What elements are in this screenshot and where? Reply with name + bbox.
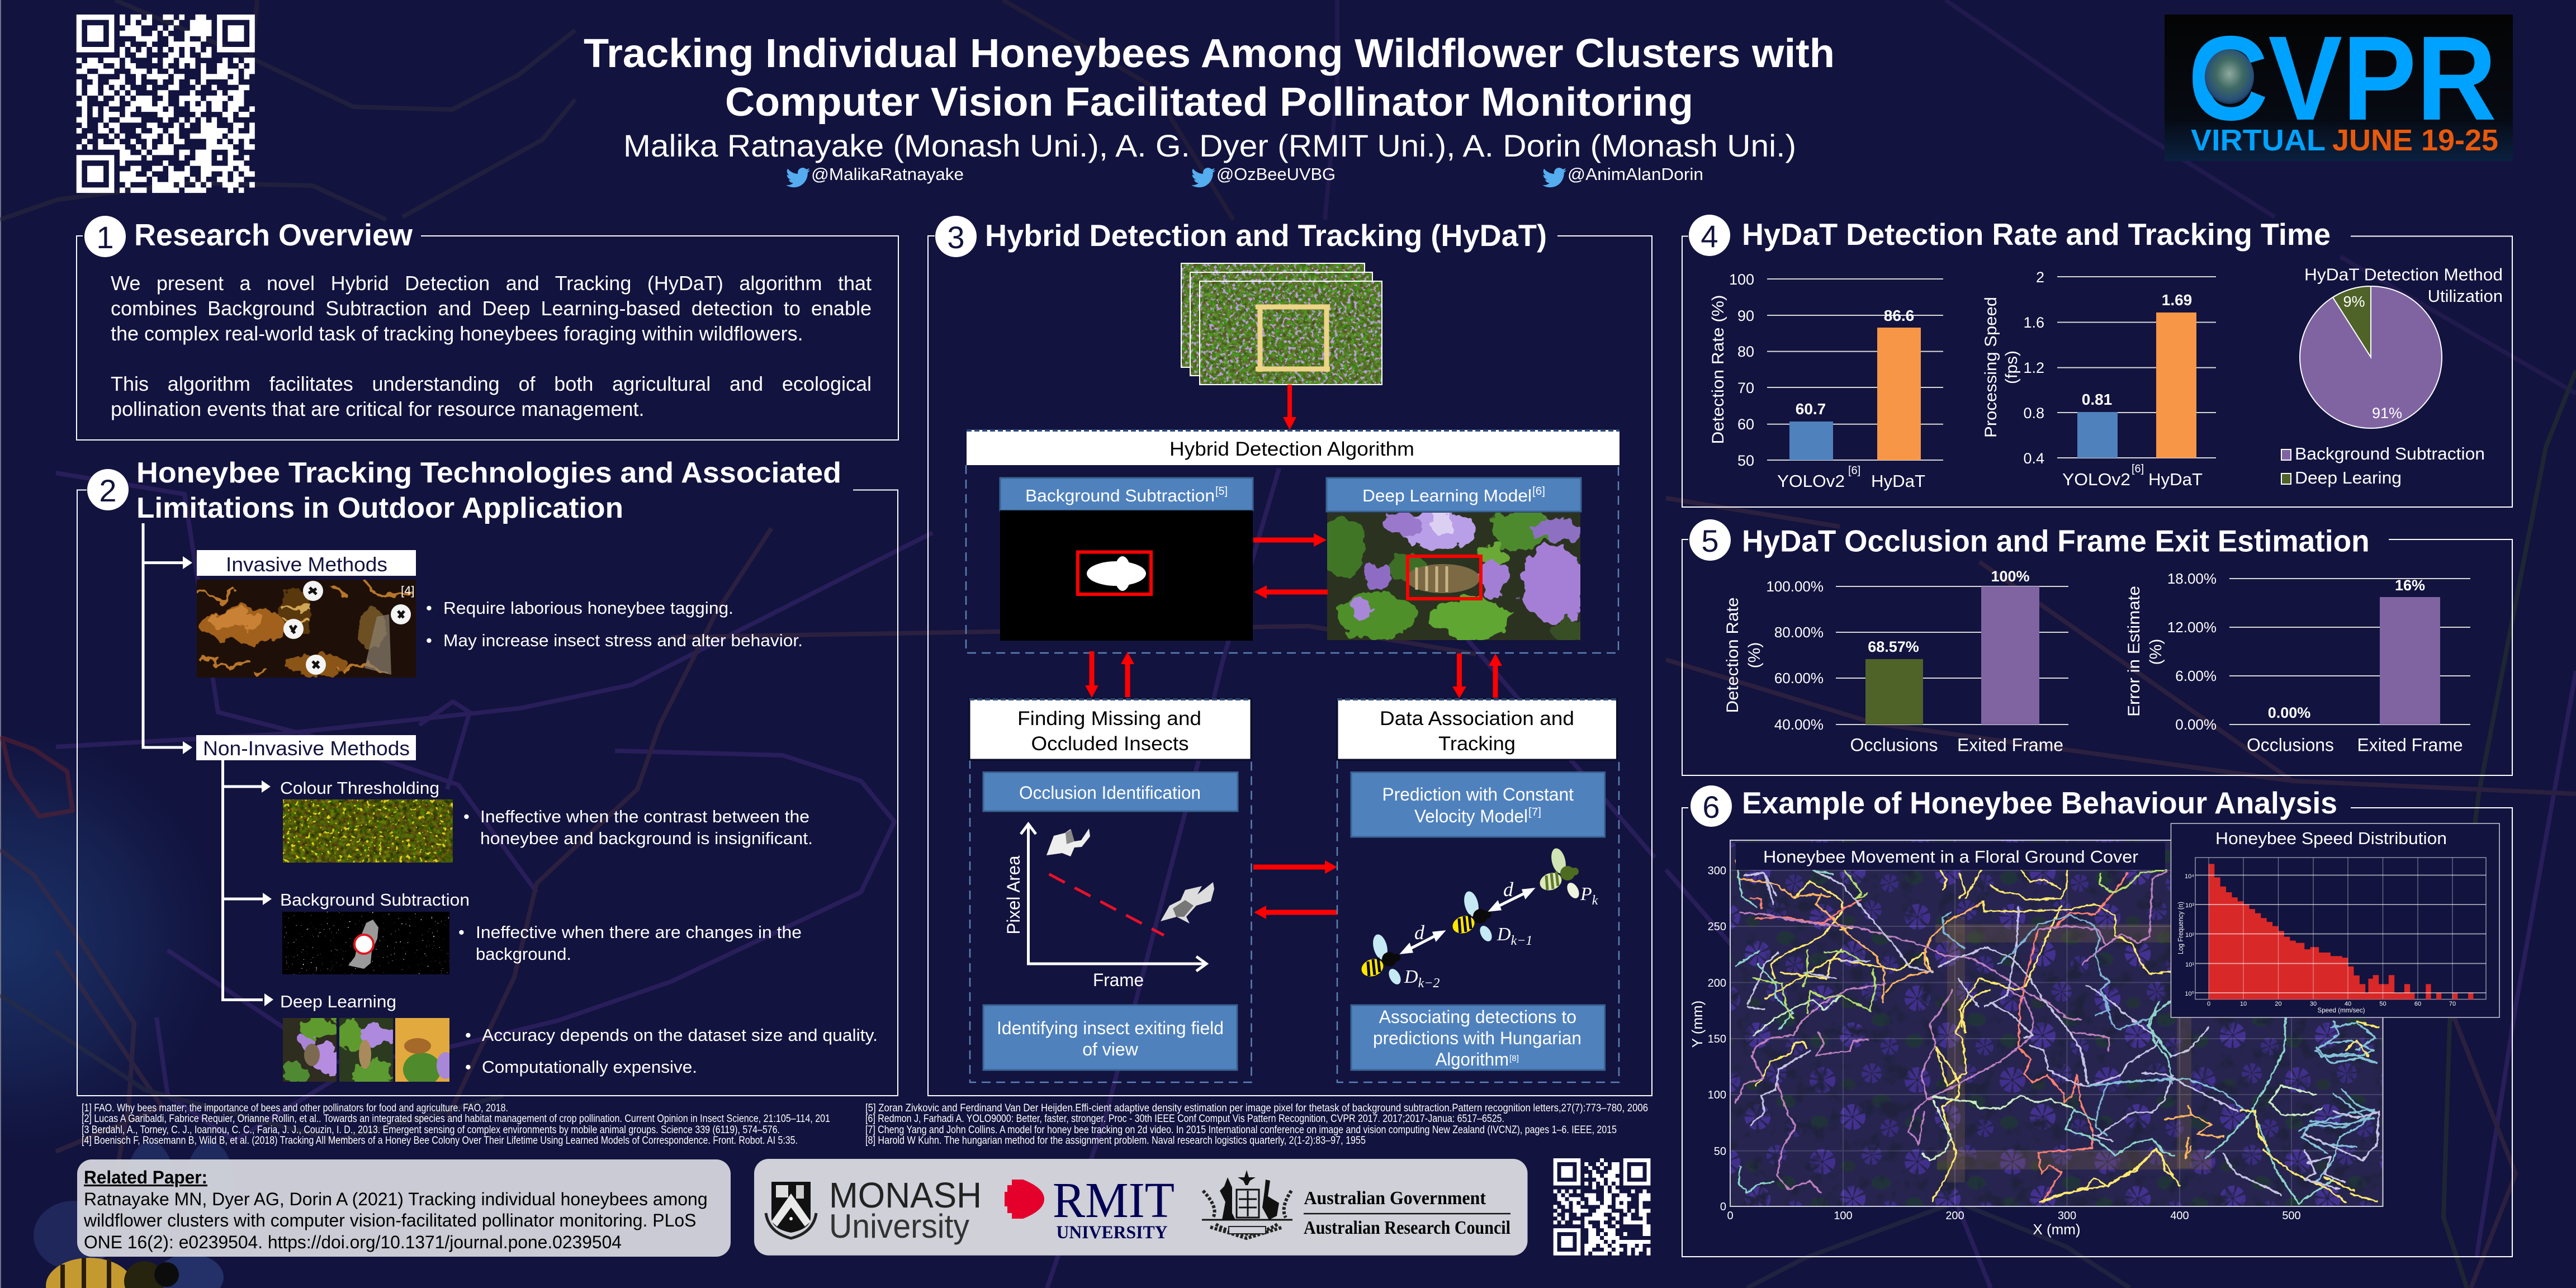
twitter handles	[786, 164, 1703, 187]
RMIT University logo: UNIVERSITY	[1057, 1223, 1168, 1243]
bar chart: detection rate: YOLOv2	[1777, 471, 1845, 491]
bar chart: detection rate: 100.00%	[1766, 578, 1824, 595]
plot axes labels: X (mm)	[2033, 1221, 2081, 1238]
invasive bullets	[426, 598, 803, 650]
Australian Research Council wordmark: Australian Government	[1304, 1188, 1486, 1209]
pixel area chart: Frame	[1093, 970, 1144, 990]
invasive bullets: •	[426, 598, 432, 618]
bar chart: detection rate: 60	[1737, 416, 1754, 433]
bar chart: processing speed	[1982, 269, 2216, 489]
twitter handles: @MalikaRatnayake	[811, 164, 964, 184]
bee tracking diagram	[1359, 847, 1598, 991]
number badge 6: 6	[1702, 789, 1720, 825]
bar chart: detection rate: Exited Frame	[1957, 735, 2063, 755]
bar chart: detection rate	[1723, 568, 2068, 755]
header	[1337, 699, 1617, 760]
occlusion identification box	[983, 773, 1238, 811]
overview paragraph: This algorithm facilitates understanding of both agricultural and ecological	[111, 372, 872, 395]
bar chart: detection rate: 60.7	[1796, 400, 1826, 418]
overview paragraph: the complex real-world task of tracking honeybees foraging within wildflowers.	[111, 322, 803, 345]
bar chart: processing speed: Processing Speed	[1982, 297, 2000, 438]
pie chart: detection method utilization: Deep Learing	[2295, 468, 2402, 487]
bar chart: detection rate: (%)	[1745, 642, 1764, 668]
associating detections box: Algorithm	[1436, 1049, 1509, 1069]
inset histogram: speed distribution: 10¹	[2185, 962, 2194, 968]
icon: twitter bird	[1191, 168, 1215, 187]
background subtraction: •	[458, 922, 465, 942]
Monash University logo: MONASH	[829, 1175, 982, 1215]
bar chart: processing speed: [6]	[2132, 463, 2144, 475]
bar chart: processing speed: 1.6	[2023, 314, 2044, 331]
photo: tagged honeybees: [4]	[401, 584, 414, 598]
hybrid detection header: Hybrid Detection Algorithm	[1169, 438, 1414, 460]
deep learning	[280, 992, 878, 1088]
arrow: background subtraction to deep learning	[1253, 533, 1327, 547]
inset histogram: speed distribution: 10²	[2185, 932, 2194, 939]
bar chart: detection rate: Detection Rate (%)	[1709, 295, 1727, 444]
bar chart: error in estimate: 16%	[2395, 577, 2425, 594]
inset histogram: speed distribution: Speed (mm/sec)	[2318, 1006, 2365, 1014]
panel 5: occlusion and frame exit	[1682, 519, 2512, 775]
pie chart: detection method utilization: 9%	[2343, 293, 2365, 310]
number badge 3: 3	[947, 220, 965, 255]
pie chart: detection method utilization: 91%	[2372, 405, 2402, 422]
inset histogram: speed distribution: 50	[2379, 1001, 2386, 1007]
number badge 4: 4	[1701, 219, 1718, 254]
inset histogram: speed distribution: 40	[2345, 1001, 2351, 1007]
bee tracking diagram: D	[1497, 924, 1511, 945]
number badge 2	[87, 469, 129, 510]
arrow: deep learning to background subtraction	[1254, 585, 1328, 599]
tree connector arrows	[143, 523, 273, 1006]
title	[584, 31, 1835, 125]
inset histogram: speed distribution: Honeybee Speed Distribution	[2215, 828, 2447, 848]
bar chart: detection rate: 40.00%	[1774, 716, 1824, 733]
invasive methods label: Invasive Methods	[226, 553, 387, 576]
plot axes labels: 0	[1720, 1201, 1726, 1213]
inset histogram: speed distribution: 10³	[2185, 902, 2194, 909]
deep learning module	[1319, 478, 1592, 643]
plot title band	[1736, 842, 2165, 870]
inset histogram: speed distribution: 10⁴	[2185, 873, 2194, 880]
prediction box: Prediction with Constant	[1382, 784, 1574, 804]
number badge 5	[1689, 519, 1731, 561]
associating detections box: predictions with Hungarian	[1373, 1028, 1581, 1048]
colour thresholding: honeybee and background is insignificant.	[480, 828, 813, 848]
references left: [1] FAO. Why bees matter; the importance of bees and other pollinators for food and agriculture. FAO, 2018.	[82, 1102, 508, 1114]
number badge 6	[1690, 785, 1732, 827]
deep learning module: Deep Learning Model	[1362, 486, 1532, 505]
inset histogram: speed distribution: 10⁰	[2185, 991, 2195, 997]
icon: twitter bird	[786, 168, 810, 187]
photo: yellow flowers	[283, 799, 453, 863]
CVPR logo: CVPR	[2188, 11, 2497, 145]
plot axes labels: 300	[2058, 1210, 2076, 1222]
bar chart: processing speed: 0.81	[2082, 391, 2112, 408]
number badge 1: 1	[96, 220, 114, 255]
RMIT University logo	[1005, 1173, 1175, 1243]
colour thresholding	[280, 778, 813, 863]
deep learning: Deep Learning	[280, 992, 396, 1011]
twitter handles: @AnimAlanDorin	[1568, 164, 1703, 184]
Australian Research Council wordmark: Australian Research Council	[1304, 1218, 1510, 1238]
bee tracking diagram: k−1	[1511, 934, 1532, 948]
QR code bottom right	[1554, 1158, 1650, 1256]
inset histogram: speed distribution	[2171, 823, 2499, 1017]
plot axes labels: 150	[1708, 1033, 1726, 1045]
inset histogram: speed distribution: 0	[2207, 1001, 2210, 1007]
bar chart: processing speed: YOLOv2	[2062, 470, 2130, 489]
CVPR logo: JUNE 19-25	[2332, 124, 2498, 157]
plot axes labels: 200	[1708, 977, 1726, 989]
pixel area chart: Pixel Area	[1003, 855, 1024, 935]
background subtraction: background.	[476, 944, 571, 964]
references right	[865, 1102, 1648, 1147]
bar chart: processing speed: 1.2	[2023, 359, 2044, 376]
header	[969, 699, 1251, 760]
photos: bee crops	[282, 1015, 454, 1088]
panel 4: detection rate and tracking time	[1682, 215, 2512, 507]
heading: HyDaT Occlusion and Frame Exit Estimation	[1742, 523, 2370, 558]
background subtraction module	[1000, 478, 1253, 641]
bee trajectories	[1736, 861, 2379, 1204]
number badge 4	[1689, 215, 1730, 256]
deep learning module: [6]	[1532, 485, 1545, 498]
invasive bullets: •	[426, 631, 432, 650]
references right: [5] Zoran Zivkovic and Ferdinand Van Der Heijden.Effi-cient adaptive density estimation per image pixel for thetask of background subtraction.Pattern recognition letters,27(7):773–780, 2006	[865, 1102, 1648, 1114]
bar chart: detection rate: 50	[1737, 452, 1754, 469]
plot axes labels: 400	[2170, 1210, 2189, 1222]
identifying insect exiting box: Identifying insect exiting field	[997, 1018, 1224, 1038]
bar chart: detection rate: HyDaT	[1871, 471, 1925, 491]
bar chart: error in estimate: (%)	[2147, 639, 2165, 665]
bee tracking diagram: k−2	[1418, 976, 1439, 991]
photo: bee on flowers	[1327, 513, 1580, 640]
bee tracking diagram: k	[1592, 893, 1598, 908]
bar chart: error in estimate: Exited Frame	[2357, 735, 2463, 755]
related paper card: ONE 16(2): e0239504. https://doi.org/10.1371/journal.pone.0239504	[84, 1232, 622, 1252]
background subtraction: Background Subtraction	[280, 890, 470, 910]
deep learning: Accuracy depends on the dataset size and quality.	[482, 1025, 878, 1045]
bee tracking diagram: d	[1503, 878, 1514, 901]
invasive methods label	[197, 550, 416, 576]
Australian Research Council wordmark	[1304, 1188, 1510, 1238]
inset histogram: speed distribution: 30	[2310, 1001, 2317, 1007]
bar chart: error in estimate: 12.00%	[2167, 619, 2217, 636]
overview paragraph: combines Background Subtraction and Deep Learning-based detection to enable	[111, 297, 872, 320]
arrows: occlusion and tracking exchange	[1253, 860, 1338, 919]
bar chart: error in estimate: 0.00%	[2175, 716, 2217, 733]
associating detections box	[1351, 1005, 1605, 1070]
plot axes labels	[1689, 865, 2301, 1238]
header: Occluded Insects	[1031, 733, 1188, 755]
CVPR logo: VIRTUAL	[2191, 124, 2326, 157]
number badge 5: 5	[1701, 523, 1719, 558]
data association and tracking	[1337, 699, 1619, 1082]
movement plot	[1689, 840, 2383, 1238]
bar chart: detection rate: 100%	[1991, 568, 2030, 585]
number badge 2: 2	[99, 473, 117, 508]
occlusion identification box: Occlusion Identification	[1019, 783, 1201, 803]
references right: [8] Harold W Kuhn. The hungarian method for the assignment problem. Naval research logistics quarterly, 2(1-2):83–97, 1955	[865, 1135, 1366, 1147]
title: Computer Vision Facilitated Pollinator Monitoring	[725, 80, 1693, 125]
bar chart: processing speed: HyDaT	[2148, 470, 2203, 489]
header: Finding Missing and	[1017, 708, 1201, 730]
plot axes labels: 200	[1945, 1210, 1964, 1222]
prediction box: [7]	[1528, 806, 1541, 818]
deep learning: •	[465, 1025, 471, 1045]
identifying insect exiting box: of view	[1082, 1039, 1139, 1059]
bar chart: detection rate: 100	[1729, 271, 1754, 288]
RMIT University logo: RMIT	[1053, 1173, 1175, 1228]
inset histogram: speed distribution: 70	[2449, 1001, 2456, 1007]
heading: Honeybee Tracking Technologies and Associated	[136, 457, 841, 489]
panel 2: tracking technologies	[77, 457, 898, 1096]
pie chart: detection method utilization: Utilization	[2428, 286, 2503, 306]
authors: Malika Ratnayake (Monash Uni.), A. G. Dyer (RMIT Uni.), A. Dorin (Monash Uni.)	[623, 128, 1796, 163]
inset histogram: speed distribution: 20	[2275, 1001, 2282, 1007]
related paper card: Related Paper:	[84, 1167, 207, 1187]
bar chart: error in estimate: Error in Estimate	[2125, 586, 2143, 717]
pie chart: detection method utilization: HyDaT Detection Method	[2304, 265, 2503, 284]
bar chart: error in estimate: 6.00%	[2175, 667, 2217, 684]
overview paragraph: We present a novel Hybrid Detection and Tracking (HyDaT) algorithm that	[111, 272, 872, 295]
heading: HyDaT Detection Rate and Tracking Time	[1742, 217, 2331, 252]
invasive bullets: May increase insect stress and alter behavior.	[443, 631, 803, 650]
related paper card: Ratnayake MN, Dyer AG, Dorin A (2021) Tracking individual honeybees among	[84, 1189, 708, 1209]
plot title band: Honeybee Movement in a Floral Ground Cover	[1763, 847, 2138, 866]
heading: Example of Honeybee Behaviour Analysis	[1742, 785, 2337, 820]
photo stack: video frames	[1181, 263, 1382, 385]
heading	[136, 457, 841, 524]
overview paragraph	[111, 271, 872, 438]
plot axes labels: 0	[1727, 1210, 1734, 1222]
Monash University logo: University	[829, 1208, 969, 1245]
heading: Research Overview	[134, 217, 413, 252]
finding missing and occluded insects	[969, 699, 1251, 1082]
bar chart: processing speed: 2	[2036, 269, 2044, 286]
bar chart: detection rate: [6]	[1848, 465, 1860, 477]
Australian coat of arms	[1202, 1170, 1292, 1238]
deep learning: •	[465, 1057, 471, 1077]
photo: binary mask	[282, 912, 449, 974]
plot axes labels: 300	[1708, 865, 1726, 877]
references right: [7] Cheng Yang and John Collins. A model for honey bee tracking on 2d video. In 2015 International conference on image and vision computing New Zealand (IVCNZ), pages 1–6. IEEE, 2015	[865, 1124, 1617, 1136]
background subtraction: Ineffective when there are changes in the	[476, 922, 802, 942]
hybrid detection group	[966, 430, 1620, 653]
number badge 3	[935, 216, 977, 257]
heading: Limitations in Outdoor Application	[136, 492, 623, 524]
logo strip	[754, 1159, 1527, 1256]
references right: [6] Redmon J, Farhadi A. YOLO9000: Better, faster, stronger. Proc - 30th IEEE Conf Comput Vis Pattern Recognition, CVPR 2017. 2017;2017-Janua: 6517–6525.	[865, 1113, 1504, 1125]
plot axes labels: 100	[1834, 1210, 1853, 1222]
number badge 1	[84, 216, 126, 257]
heading: Hybrid Detection and Tracking (HyDaT)	[985, 218, 1547, 253]
photo: tagged honeybees	[197, 580, 416, 678]
colour thresholding: Ineffective when the contrast between the	[480, 807, 809, 826]
invasive bullets: Require laborious honeybee tagging.	[443, 598, 733, 618]
inset histogram: speed distribution: 60	[2414, 1001, 2421, 1007]
bar chart: detection rate: 60.00%	[1774, 670, 1824, 686]
bar chart: error in estimate: 18.00%	[2167, 570, 2217, 587]
inset histogram: speed distribution: 10	[2240, 1001, 2247, 1007]
icon: twitter bird	[1542, 168, 1566, 187]
bar chart: processing speed: 0.8	[2023, 405, 2044, 422]
plot axes labels: 50	[1714, 1145, 1726, 1158]
colour thresholding: •	[463, 807, 470, 826]
ruler frame in photo	[1935, 917, 2212, 1182]
bar chart: processing speed: (fps)	[2002, 351, 2021, 384]
non-invasive methods label: Non-Invasive Methods	[203, 737, 410, 760]
background subtraction	[280, 890, 802, 974]
references left	[82, 1102, 830, 1147]
arrows: detection and tracking exchange	[1452, 654, 1502, 698]
bar chart: error in estimate: Occlusions	[2247, 735, 2334, 755]
bar chart: detection rate: 80.00%	[1774, 624, 1824, 641]
related paper card	[77, 1159, 731, 1257]
arrow: frames to algorithm	[1283, 385, 1296, 430]
deep learning: Computationally expensive.	[482, 1057, 697, 1077]
panel 3: hybrid detection and tracking	[928, 216, 1652, 1096]
header: Tracking	[1438, 733, 1516, 755]
references left: [3 Berdahl, A., Torney, C. J., Ioannou, C. C., Faria, J. J., Couzin, I. D., 2013. Emergent sensing of complex environments by mobile animal groups. Science 339 (6119), 574–576.	[82, 1124, 780, 1136]
icon: bee in lower left corner	[46, 1258, 179, 1288]
arrows: detection and occlusion exchange	[1085, 651, 1134, 698]
bar chart: detection rate: 70	[1737, 380, 1754, 396]
panel 6: behaviour analysis	[1682, 785, 2512, 1257]
pie chart: detection method utilization	[2281, 265, 2503, 487]
QR code top left	[77, 15, 255, 193]
plot axes labels: 500	[2282, 1210, 2301, 1222]
panel 1: research overview	[77, 216, 898, 440]
background subtraction module: Background Subtraction	[1025, 486, 1215, 505]
background subtraction module: [5]	[1215, 485, 1228, 498]
Monash University logo	[766, 1175, 982, 1245]
bar chart: error in estimate	[2125, 570, 2470, 755]
pie chart: detection method utilization: Background Subtraction	[2295, 444, 2485, 463]
bar chart: error in estimate: 0.00%	[2268, 704, 2310, 721]
identifying insect exiting box	[983, 1005, 1237, 1070]
pixel area chart	[1003, 824, 1214, 990]
bar chart: detection rate: Detection Rate	[1723, 597, 1742, 713]
associating detections box: Associating detections to	[1379, 1007, 1576, 1027]
plot axes labels: Y (mm)	[1689, 1001, 1706, 1048]
prediction box	[1351, 773, 1605, 837]
bar chart: processing speed: 1.69	[2162, 291, 2192, 309]
bar chart: processing speed: 0.4	[2023, 450, 2044, 467]
twitter handles: @OzBeeUVBG	[1216, 164, 1336, 184]
bee tracking diagram: P	[1580, 884, 1592, 905]
related paper card: wildflower clusters with computer vision-facilitated pollinator monitoring. PLoS	[83, 1210, 696, 1230]
bar chart: detection rate: Occlusions	[1850, 735, 1938, 755]
bar chart: detection rate: 90	[1737, 307, 1754, 324]
colour thresholding: Colour Thresholding	[280, 778, 439, 798]
bar chart: detection rate: 68.57%	[1868, 638, 1919, 655]
title: Tracking Individual Honeybees Among Wildflower Clusters with	[584, 31, 1835, 76]
overview paragraph: pollination events that are critical for resource management.	[111, 397, 644, 420]
bee tracking diagram: D	[1404, 967, 1418, 987]
inset histogram: speed distribution: Log Frequency (n)	[2176, 902, 2185, 954]
prediction box: Velocity Model	[1414, 806, 1528, 826]
header: Data Association and	[1380, 708, 1574, 730]
references left: [2] Lucas A Garibaldi, Fabrice Requier, Orianne Rollin, et al.. Towards an integrated species and habitat management of crop pollination. Current Opinion in Insect Science, 21:105–114, 201	[82, 1113, 830, 1125]
bar chart: detection rate: 86.6	[1884, 307, 1914, 324]
plot axes labels: 100	[1708, 1089, 1726, 1101]
hybrid detection header	[967, 430, 1620, 465]
references left: [4] Boenisch F, Rosemann B, Wild B, et al. (2018) Tracking All Members of a Honey Bee Colony Over Their Lifetime Using Learned Models of Correspondence. Front. Robot. AI 5:35.	[82, 1135, 798, 1147]
plot axes labels: 250	[1708, 921, 1726, 933]
bar chart: detection rate	[1709, 271, 1943, 491]
bee tracking diagram: d	[1414, 921, 1425, 944]
associating detections box: [8]	[1509, 1054, 1519, 1063]
bar chart: detection rate: 80	[1737, 343, 1754, 360]
